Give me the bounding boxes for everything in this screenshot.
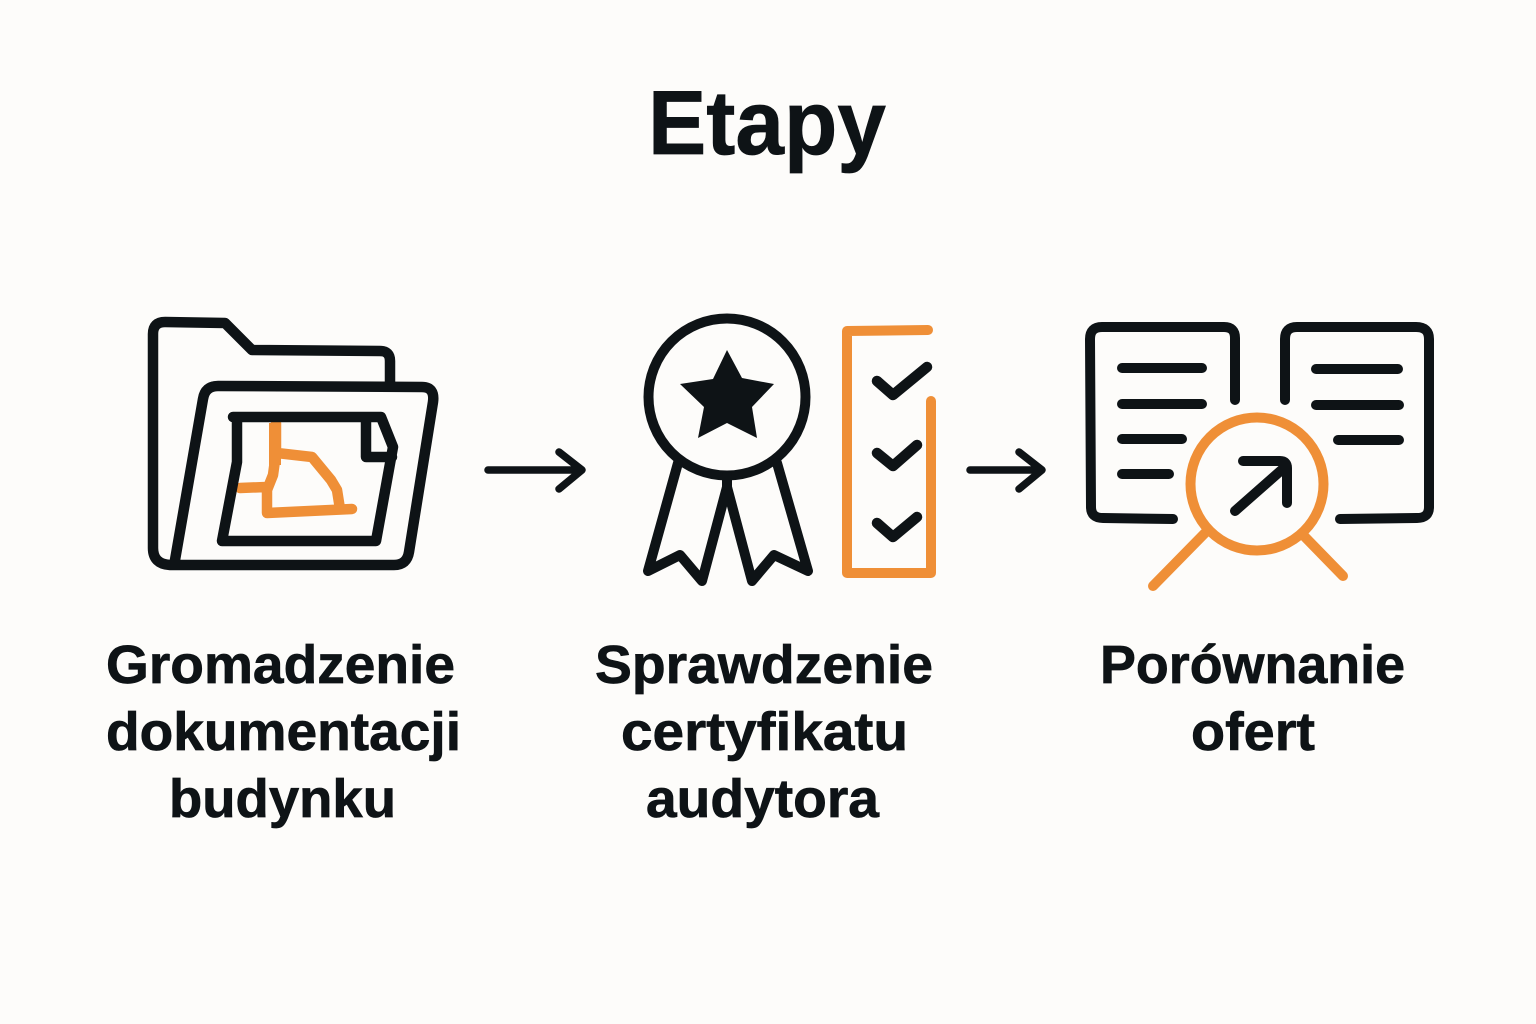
ribbons [648, 463, 808, 581]
label: step 2: audytora [646, 769, 880, 829]
right document [1285, 327, 1429, 519]
folder outline [153, 322, 433, 565]
building plan orange lines [240, 423, 352, 513]
label: step 1 [106, 635, 461, 829]
plan orange thick stem [269, 423, 281, 465]
label: step 3 [1100, 635, 1405, 762]
label: step 3: ofert [1191, 702, 1315, 762]
label: step 2: Sprawdzenie [595, 635, 933, 695]
label: step 1: budynku [169, 769, 396, 829]
magnifier [1153, 533, 1343, 586]
icon: comparing documents with magnifier [1090, 327, 1429, 586]
icon: checklist [847, 330, 931, 573]
trend arrow [1235, 461, 1287, 511]
icon: award rosette [648, 318, 808, 581]
arrow: step 1 to step 2 [488, 452, 582, 489]
arrow: step 2 to step 3 [970, 452, 1042, 489]
rosette circle [648, 318, 806, 476]
label: step 1: dokumentacji [106, 702, 461, 762]
checklist frame [847, 330, 931, 573]
label: step 2: certyfikatu [621, 702, 908, 762]
star [680, 350, 774, 438]
plan sheet [222, 417, 393, 541]
title: Etapy [648, 73, 886, 174]
label: step 3: Porównanie [1100, 635, 1405, 695]
left document [1090, 327, 1235, 519]
label: step 1: Gromadzenie [106, 635, 455, 695]
check marks [877, 367, 927, 537]
icon: folder with building plan [153, 322, 433, 565]
label: step 2 [595, 635, 933, 829]
